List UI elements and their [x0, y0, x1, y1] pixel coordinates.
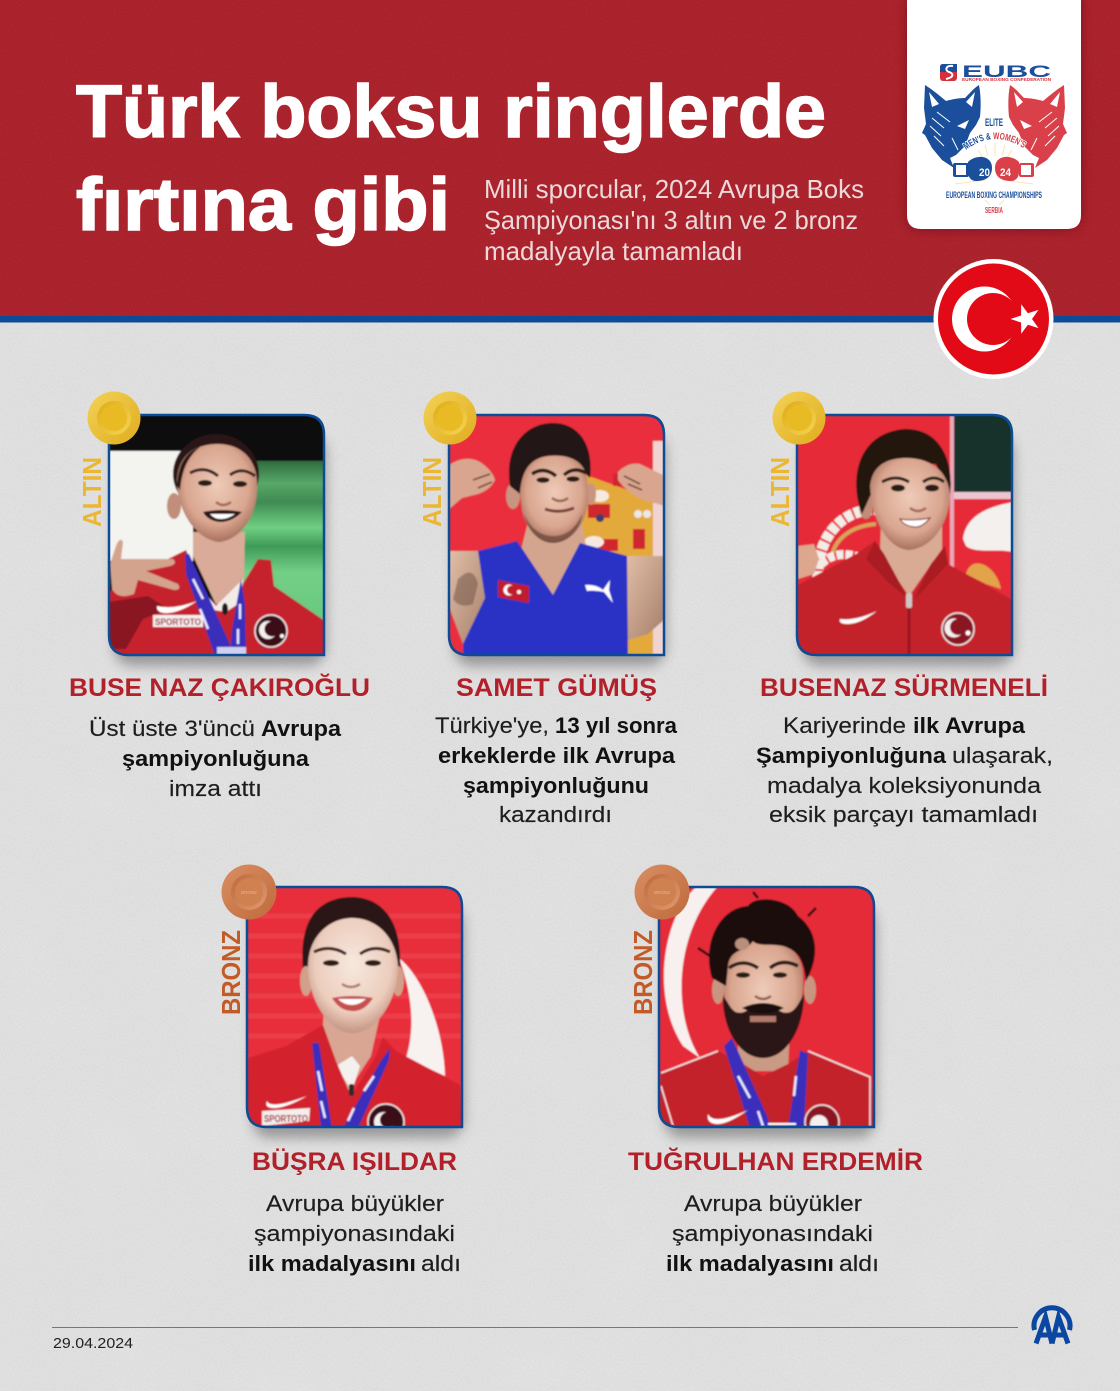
description: [89, 716, 342, 801]
description: Üst üste 3'üncü: [89, 716, 255, 741]
label: ALTIN: ALTIN: [77, 457, 107, 527]
description: aldı: [421, 1251, 461, 1276]
blue glove: 20: [979, 167, 990, 179]
medal: bronze: [222, 864, 276, 920]
footer rule: [52, 1327, 1018, 1328]
medal: gold: [772, 392, 826, 444]
description: [756, 713, 1053, 827]
description: [248, 1191, 461, 1276]
description: şampiyonluğunu: [463, 773, 649, 798]
date: 29.04.2024: [53, 1336, 133, 1352]
medal: gold: [88, 392, 140, 444]
photo card 4: [246, 886, 464, 1140]
subtitle: [484, 174, 864, 266]
label: BRONZ: BRONZ: [628, 930, 658, 1015]
medal: bronze: BRONZ: [241, 890, 257, 895]
photo card 2: [448, 414, 666, 666]
red wolf: [1008, 85, 1067, 168]
label: ALTIN: ALTIN: [417, 457, 447, 527]
description: erkeklerde ilk Avrupa: [438, 743, 676, 768]
photo card 4: SPORTOTO: [264, 1114, 308, 1125]
burst: [955, 143, 1033, 205]
description: Avrupa büyükler: [684, 1191, 862, 1216]
icon: AA logo: [1034, 1308, 1070, 1344]
red glove: [995, 157, 1034, 181]
serbia: SERBIA: [985, 205, 1003, 215]
photo card 3: [796, 414, 1014, 666]
description: eksik parçayı tamamladı: [769, 802, 1038, 827]
description: Türkiye'ye,: [435, 713, 549, 738]
description: ilk madalyasını: [248, 1251, 416, 1276]
description: şampiyonasındaki: [672, 1221, 873, 1246]
red glove: 24: [1000, 167, 1012, 179]
subtitle: Şampiyonası'nı 3 altın ve 2 bronz: [484, 205, 858, 235]
blue glove: [953, 157, 992, 181]
photo card 1: SPORTOTO: [155, 617, 201, 628]
header band: [0, 0, 1120, 322]
athlete 1: Buse Naz Çakıroğlu: [69, 392, 370, 801]
medal: bronze: [634, 864, 690, 920]
EUBC mark: EUROPEAN BOXING CONFEDERATION: [962, 77, 1051, 82]
description: ilk Avrupa: [913, 713, 1026, 738]
label: ALTIN: ALTIN: [765, 457, 795, 527]
athlete 4: Büşra Işıldar: [216, 864, 464, 1276]
description: şampiyonluğuna: [122, 746, 310, 771]
label: BRONZ: BRONZ: [216, 930, 246, 1015]
description: ilk madalyasını: [666, 1251, 834, 1276]
description: imza attı: [169, 776, 262, 801]
athlete 2: Samet Gümüş: [417, 392, 678, 827]
name: TUĞRULHAN ERDEMİR: [628, 1147, 923, 1176]
arc text: MEN'S & WOMEN'S: [962, 132, 1027, 150]
description: Avrupa büyükler: [266, 1191, 444, 1216]
description: ulaşarak,: [952, 743, 1053, 768]
description: [435, 713, 678, 827]
athlete 3: Busenaz Sürmeneli: [756, 392, 1053, 827]
description: 13 yıl sonra: [555, 713, 678, 738]
subtitle: Milli sporcular, 2024 Avrupa Boks: [484, 174, 864, 204]
title: fırtına gibi: [76, 163, 450, 246]
photo card 5: [658, 886, 876, 1139]
elite text: ELITE: [985, 117, 1003, 129]
description: Şampiyonluğuna: [756, 743, 947, 768]
name: BUSE NAZ ÇAKIROĞLU: [69, 673, 370, 702]
description: [666, 1191, 879, 1276]
name: BUSENAZ SÜRMENELİ: [760, 673, 1048, 702]
description: kazandırdı: [499, 802, 612, 827]
icon: Turkish flag circle: [934, 259, 1054, 379]
description: madalya koleksiyonunda: [767, 773, 1042, 798]
title: Türk boksu ringlerde: [76, 70, 826, 153]
description: şampiyonasındaki: [254, 1221, 455, 1246]
logo card: EUBC: [902, 0, 1086, 234]
photo card 1: [108, 414, 326, 666]
name: BÜŞRA IŞILDAR: [252, 1147, 457, 1176]
medal: gold: [424, 392, 476, 444]
name: SAMET GÜMÜŞ: [456, 673, 657, 702]
blue wolf: [922, 85, 981, 168]
athlete 5: Tuğrulhan Erdemir: [628, 864, 923, 1276]
description: aldı: [839, 1251, 879, 1276]
event name: EUROPEAN BOXING CHAMPIONSHIPS: [946, 190, 1042, 201]
subtitle: madalyayla tamamladı: [484, 236, 743, 266]
EUBC mark: EUBC: [962, 62, 1051, 81]
description: Kariyerinde: [783, 713, 906, 738]
medal: bronze: BRONZ: [654, 890, 670, 895]
description: Avrupa: [261, 716, 342, 741]
title: [76, 70, 826, 246]
EUBC mark: [940, 62, 1051, 82]
